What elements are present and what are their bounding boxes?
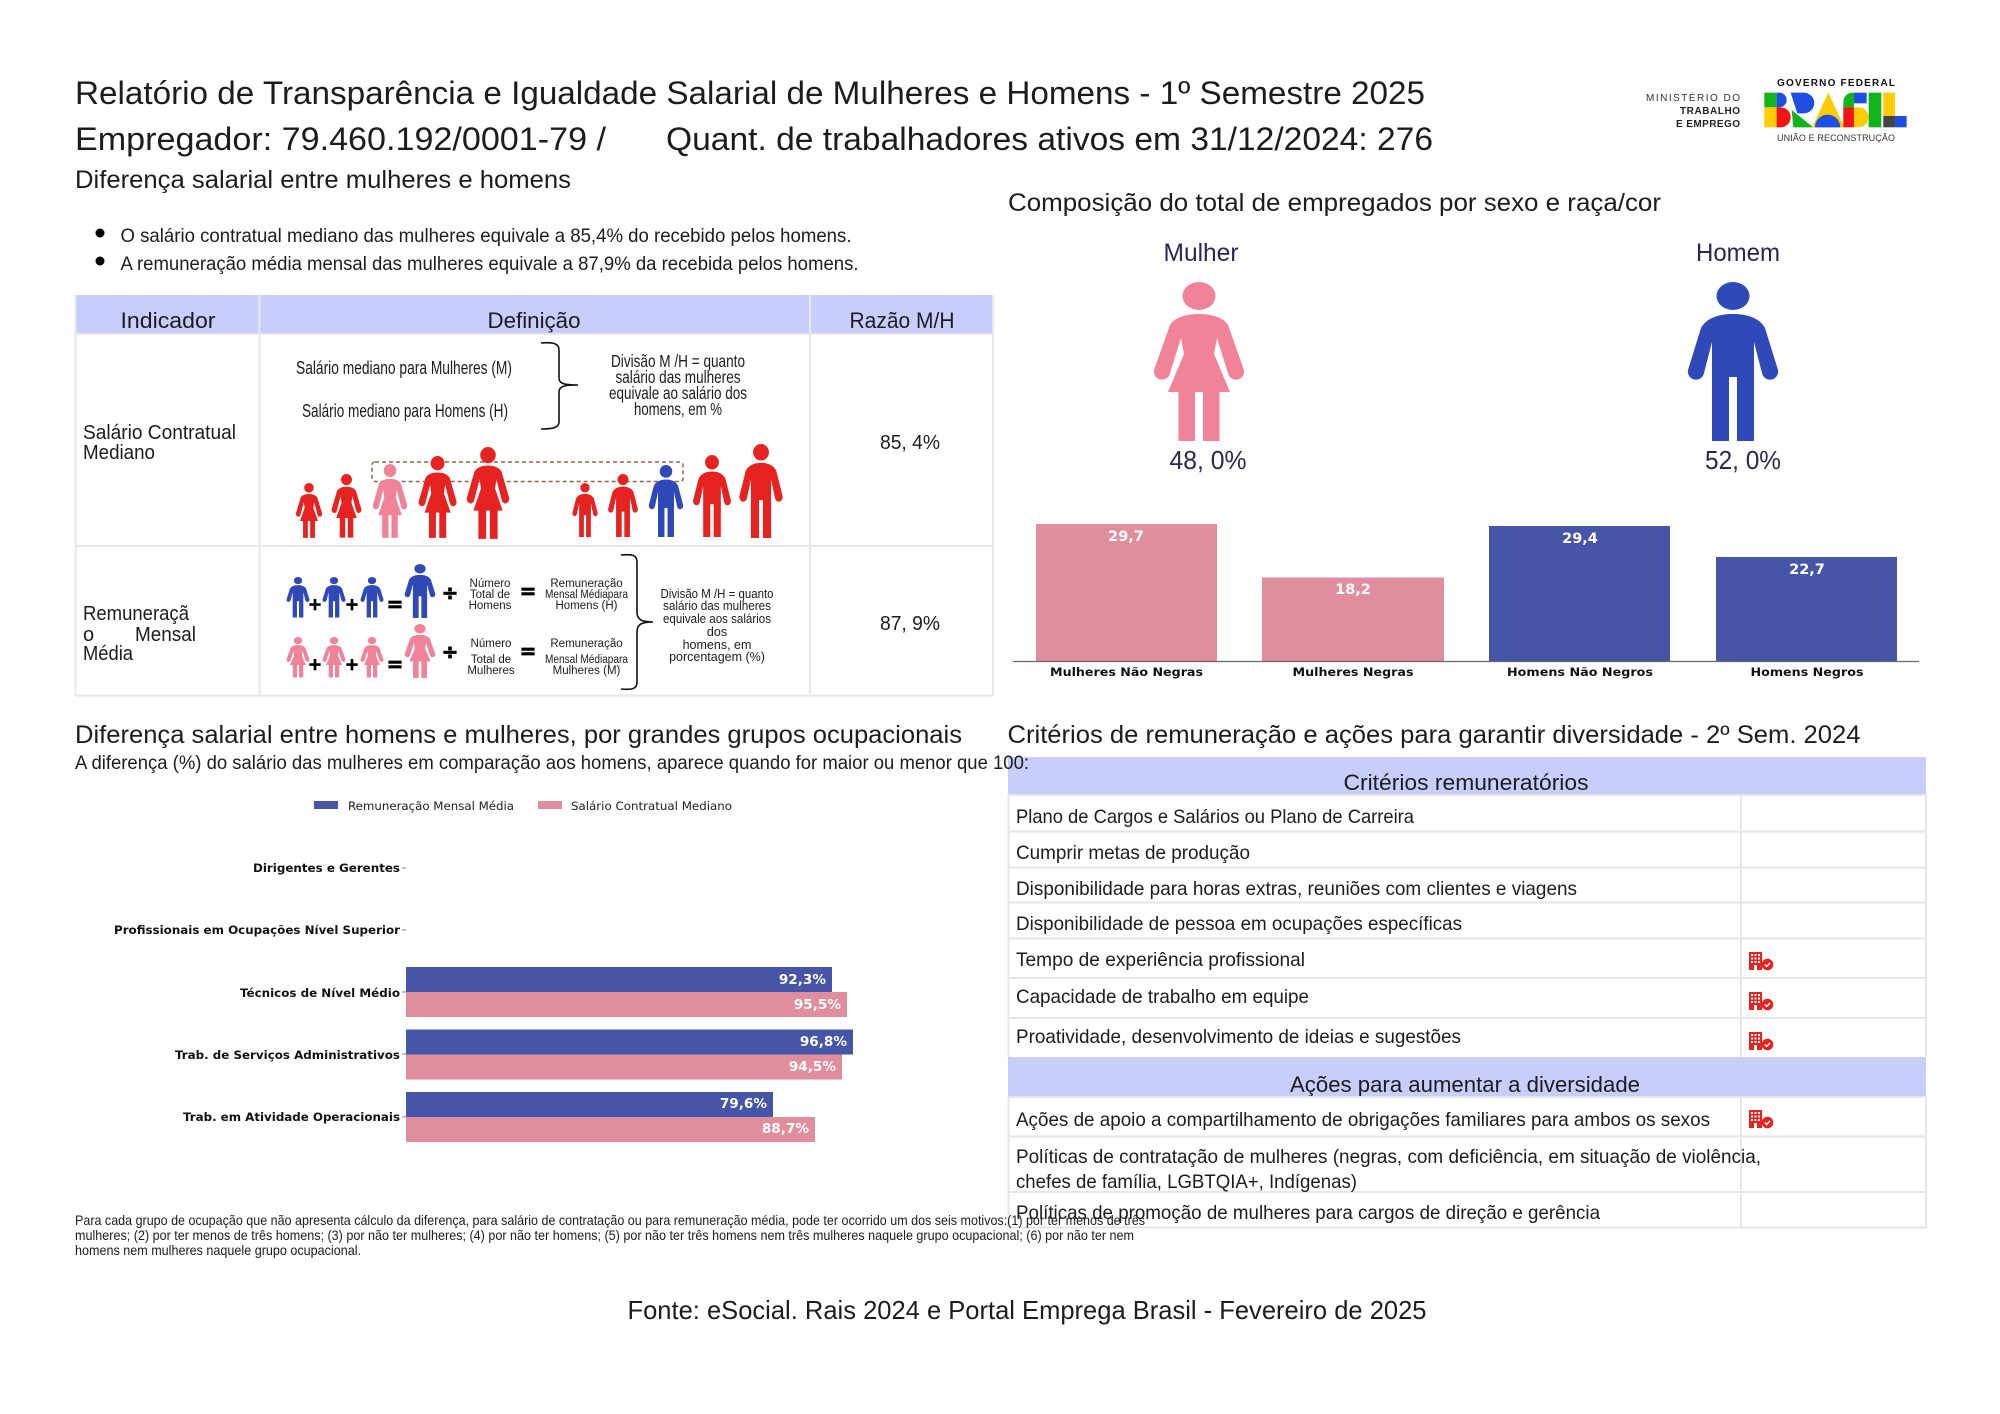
equation: men — [286, 564, 536, 618]
equation labels: Total de — [470, 589, 510, 601]
header: criteria: Critérios remuneratórios — [1344, 770, 1588, 795]
equation labels: Mulheres — [467, 665, 515, 677]
rows text: Disponibilidade para horas extras, reuniões com clientes e viagens — [1016, 878, 1577, 900]
equation: women: = — [520, 639, 536, 663]
definition: division text — [609, 351, 747, 419]
equation labels: Mensal Médiapara — [545, 654, 629, 666]
equation: men: + — [308, 595, 322, 615]
rows text: Cumprir metas de produção — [1016, 842, 1250, 864]
subheading: A diferença (%) do salário das mulheres em comparação aos homens, aparece quando for maior ou menor que 100: — [75, 753, 1029, 774]
rows text: Capacidade de trabalho em equipe — [1016, 986, 1309, 1008]
bar values: 88,7% — [762, 1121, 809, 1137]
definition: average division text: porcentagem (%) — [669, 650, 765, 664]
equation labels: Homens — [469, 600, 512, 612]
heading: occupational groups: Diferença salarial entre homens e mulheres, por grandes grupos ocupacionais — [75, 721, 962, 749]
men figures by salary — [572, 444, 783, 538]
bar chart: sex and race composition: 22,7 — [1789, 562, 1825, 578]
rows text — [1016, 806, 1761, 1224]
footnote: homens nem mulheres naquele grupo ocupacional. — [75, 1242, 361, 1258]
heading: criteria: Critérios de remuneração e ações para garantir diversidade - 2º Sem. 2024 — [1008, 721, 1861, 749]
category labels: Técnicos de Nível Médio — [240, 986, 400, 1000]
heading: composition: Composição do total de empregados por sexo e raça/cor — [1008, 189, 1661, 217]
definition: average division text: homens, em — [683, 638, 751, 652]
rows text: Disponibilidade de pessoa em ocupações específicas — [1016, 913, 1462, 935]
table header: Razão M/H — [850, 308, 954, 333]
header: actions — [1008, 1057, 1926, 1097]
bar values: 94,5% — [789, 1059, 836, 1075]
equation: women: + — [308, 655, 322, 675]
equation labels: Número — [471, 638, 511, 650]
icon: man — [1688, 282, 1778, 441]
bar values: 79,6% — [720, 1096, 767, 1112]
row label: salário contratual — [83, 422, 236, 464]
slogan: UNIÃO E RECONSTRUÇÃO — [1777, 133, 1895, 143]
row label: remuneração: o — [83, 624, 94, 646]
chart legend: Salário Contratual Mediano — [571, 799, 732, 813]
bullet list: A remuneração média mensal das mulheres equivale a 87,9% da recebida pelos homens. — [120, 254, 858, 275]
rows text: Proatividade, desenvolvimento de ideias e sugestões — [1016, 1026, 1461, 1048]
bar chart: sex and race composition: Mulheres Negras — [1292, 665, 1414, 679]
value: men share: 52, 0% — [1705, 445, 1781, 475]
definition: median labels — [296, 358, 512, 421]
table header: Indicador — [120, 308, 216, 333]
bar chart: sex and race composition — [1013, 524, 1919, 679]
category labels: Trab. em Atividade Operacionais — [183, 1110, 400, 1124]
panel: criteria table — [1008, 757, 1926, 1228]
header: criteria — [1008, 757, 1926, 795]
chart legend: Remuneração Mensal Média — [348, 799, 514, 813]
equation labels — [467, 578, 629, 677]
icon: woman — [1154, 282, 1244, 441]
value: 87,9: 87, 9% — [880, 613, 940, 635]
equation labels: Remuneração — [550, 578, 623, 590]
rows text: Políticas de contratação de mulheres (negras, com deficiência, em situação de violência, — [1016, 1146, 1761, 1168]
source line: Fonte: eSocial. Rais 2024 e Portal Emprega Brasil - Fevereiro de 2025 — [628, 1295, 1426, 1325]
row label: remuneração: Mensal — [135, 624, 196, 646]
definition: average division text: Divisão M /H = quanto — [660, 587, 774, 601]
category labels: Dirigentes e Gerentes — [253, 861, 400, 875]
rows text: Políticas de promoção de mulheres para cargos de direção e gerência — [1016, 1202, 1600, 1224]
row label: remuneração: Média — [83, 643, 134, 665]
definition: average division text: dos — [707, 625, 727, 639]
bar chart: sex and race composition: 18,2 — [1335, 582, 1371, 598]
label: Homem: Homem — [1696, 239, 1780, 267]
bar chart: sex and race composition: Homens Não Negros — [1507, 665, 1653, 679]
bars — [406, 967, 853, 1142]
brace 2 — [621, 555, 653, 689]
equation labels: Mensal Médiapara — [545, 589, 629, 601]
women figures by salary — [296, 447, 509, 539]
bullet list — [96, 226, 858, 275]
bar values: 92,3% — [779, 972, 826, 988]
bullet list: O salário contratual mediano das mulheres equivale a 85,4% do recebido pelos homens. — [120, 226, 852, 247]
category labels: Trab. de Serviços Administrativos — [175, 1048, 400, 1062]
icon: company marks — [1749, 952, 1773, 1128]
row label: salário contratual: Salário Contratual — [83, 422, 236, 444]
ministry name: TRABALHO — [1680, 106, 1740, 117]
employer identification: Empregador: 79.460.192/0001-79 / — [75, 121, 606, 157]
table header — [75, 295, 993, 334]
government label: GOVERNO FEDERAL — [1777, 78, 1895, 89]
heading: salary difference: Diferença salarial entre mulheres e homens — [75, 166, 571, 194]
bar chart: sex and race composition: 29,4 — [1562, 531, 1598, 547]
footnote — [75, 1212, 1145, 1258]
bar chart: sex and race composition: 29,7 — [1108, 529, 1144, 545]
label: Mulher: Mulher — [1164, 239, 1238, 267]
equation labels: Homens (H) — [556, 600, 618, 612]
equation: women: = — [387, 652, 403, 676]
rows text: Plano de Cargos e Salários ou Plano de Carreira — [1016, 806, 1414, 828]
equation labels: Mulheres (M) — [553, 665, 621, 677]
definition: division text: Divisão M /H = quanto — [611, 351, 745, 371]
chart legend — [314, 799, 732, 813]
title: report heading: Relatório de Transparência e Igualdade Salarial de Mulheres e Homens - 1º Semestre 2025 — [75, 75, 1425, 111]
definition: division text: equivale ao salário dos — [609, 383, 747, 403]
value: women share: 48, 0% — [1170, 445, 1246, 475]
definition: median labels: Salário mediano para Homens (H) — [302, 401, 508, 421]
ministry name — [1646, 91, 1740, 130]
definition: division text: homens, em % — [634, 399, 722, 419]
header: actions: Ações para aumentar a diversidade — [1290, 1072, 1640, 1097]
rows text: Ações de apoio a compartilhamento de obrigações familiares para ambos os sexos — [1016, 1109, 1710, 1131]
definition: division text: salário das mulheres — [616, 367, 741, 387]
bar values — [720, 972, 847, 1137]
rows text: chefes de família, LGBTQIA+, Indígenas) — [1016, 1171, 1357, 1193]
bar chart: sex and race composition: Mulheres Não Negras — [1050, 665, 1203, 679]
equation: women: + — [345, 655, 359, 675]
active workers count: Quant. de trabalhadores ativos em 31/12/2024: 276 — [666, 121, 1433, 157]
equation labels: Remuneração — [550, 638, 623, 650]
category labels: Profissionais em Ocupações Nível Superior — [114, 923, 400, 937]
category labels — [114, 861, 400, 1124]
panel: indicator table — [75, 295, 993, 696]
logo: Ministério do Trabalho e Emprego and Governo Federal — [1646, 78, 1907, 143]
bar chart: occupational groups — [114, 861, 853, 1142]
row label: salário contratual: Mediano — [83, 442, 155, 464]
value: 85,4: 85, 4% — [880, 432, 940, 454]
footnote: mulheres; (2) por ter menos de três homens; (3) por não ter mulheres; (4) por não ter homens; (5) por não ter três homens nem três mulheres naquele grupo ocupacional; (6) por não ter nem — [75, 1227, 1134, 1243]
bar chart: sex and race composition: Homens Negros — [1750, 665, 1864, 679]
equation: men: ÷ — [442, 581, 458, 605]
definition: average division text: salário das mulheres — [663, 599, 771, 613]
ministry name: E EMPREGO — [1676, 119, 1740, 130]
equation: men: = — [520, 579, 536, 603]
equation labels: Total de — [471, 654, 511, 666]
row label: remuneração — [83, 603, 196, 665]
footnote: Para cada grupo de ocupação que não apresenta cálculo da diferença, para salário de contratação ou para remuneração média, pode ter ocorrido um dos seis motivos:(1) por ter menos de três — [75, 1212, 1145, 1228]
definition: average division text: equivale aos salários — [663, 612, 771, 626]
equation: women — [286, 624, 536, 678]
equation labels: Número — [470, 578, 510, 590]
table header: Definição — [488, 308, 580, 333]
equation: women: ÷ — [442, 640, 458, 664]
brace — [541, 343, 578, 429]
bar values: 96,8% — [800, 1034, 847, 1050]
colourful BRASIL mark — [1764, 93, 1907, 127]
row label: remuneração: Remuneraçã — [83, 603, 190, 625]
equation: men: + — [345, 595, 359, 615]
definition: median labels: Salário mediano para Mulheres (M) — [296, 358, 512, 378]
equation: men: = — [387, 592, 403, 616]
ministry name: MINISTÉRIO DO — [1646, 91, 1740, 104]
bar values: 95,5% — [794, 997, 841, 1013]
definition: average division text — [660, 587, 774, 664]
dashed median box — [372, 462, 683, 482]
rows text: Tempo de experiência profissional — [1016, 949, 1305, 971]
